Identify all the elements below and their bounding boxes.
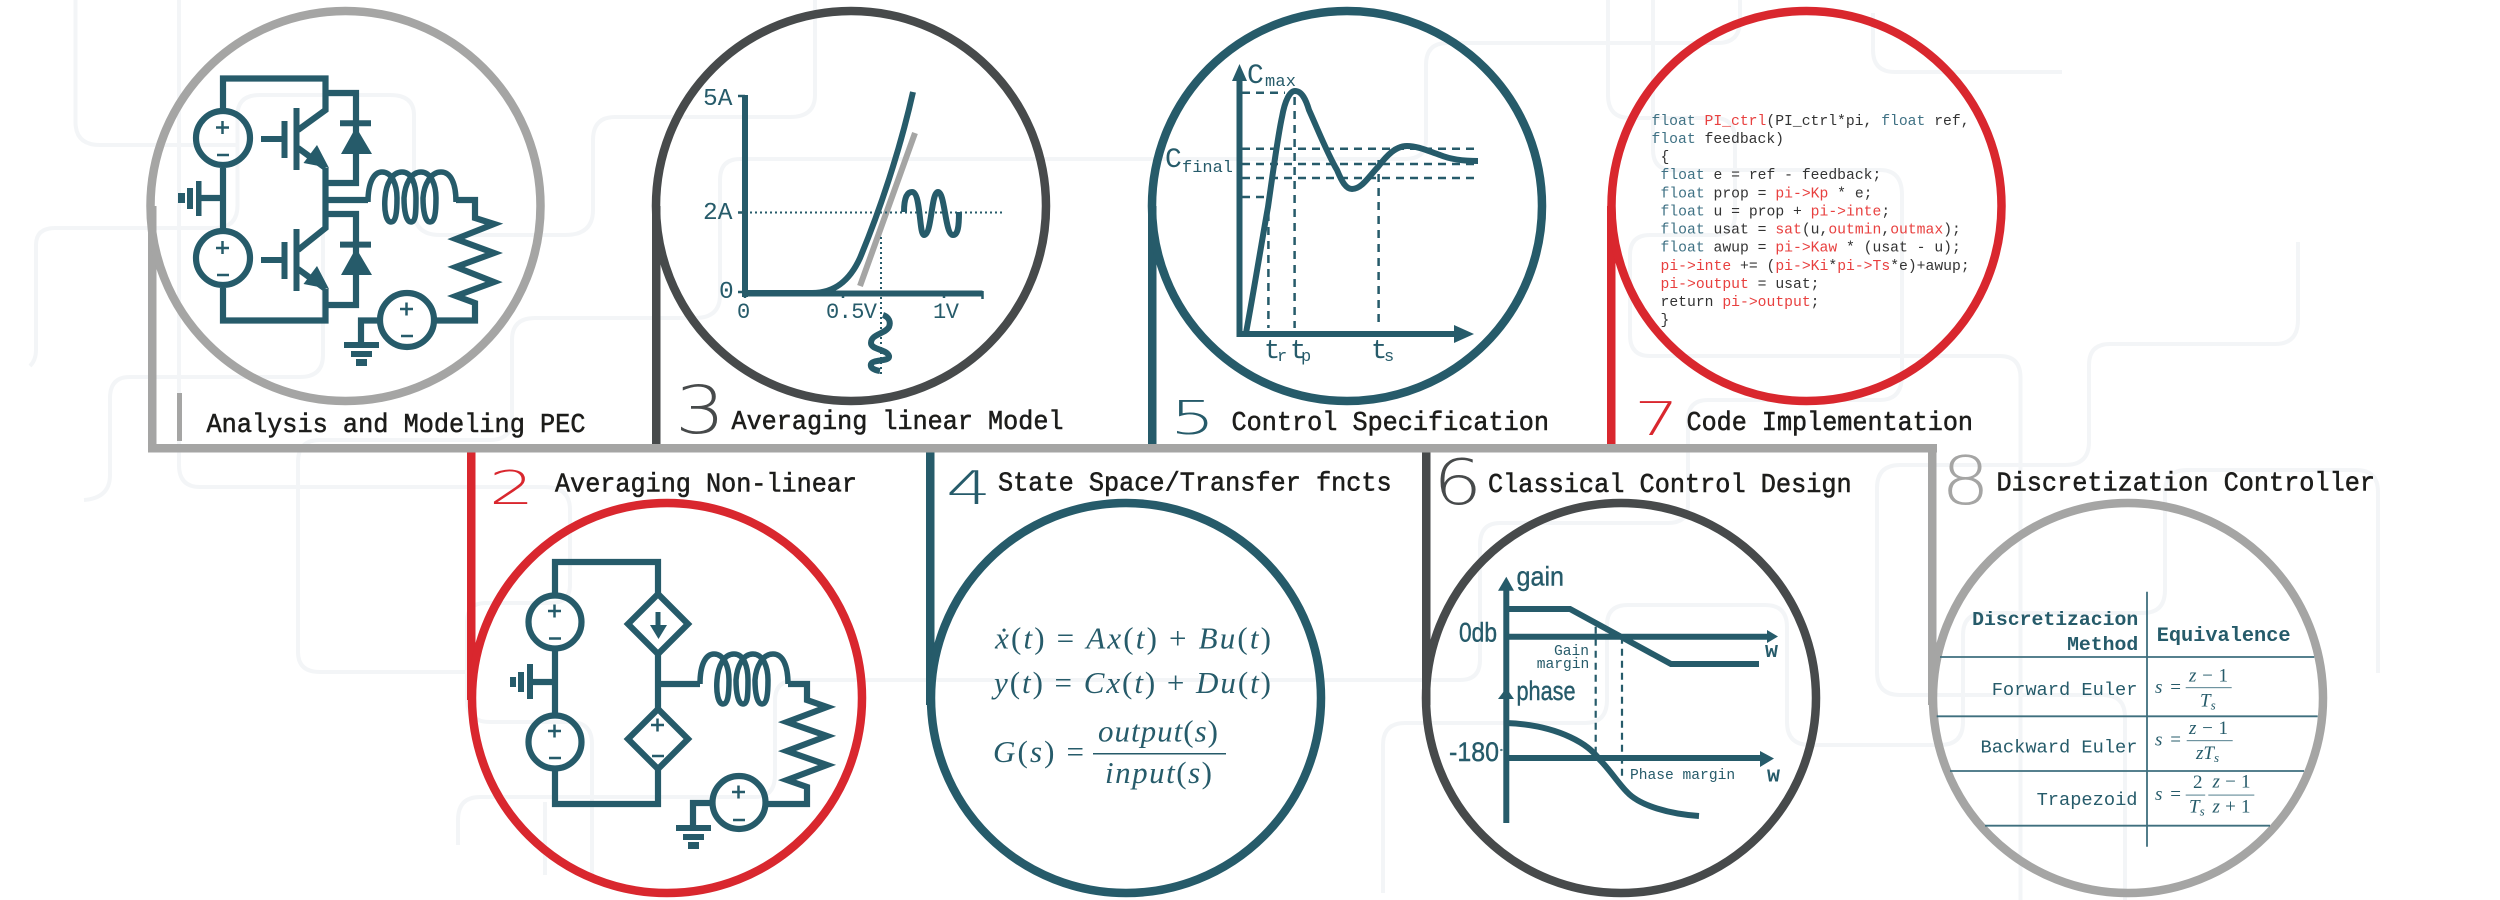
- icon: half-bridge IGBT circuit: [178, 78, 494, 366]
- heading 7: Code Implementation: [1686, 408, 1973, 438]
- table: discretization methods: s =: [2155, 677, 2181, 698]
- code block: PI controller: float u = prop + pi->inte;: [1660, 204, 1890, 220]
- chart: step response: r: [1277, 348, 1287, 367]
- chart: diode I-V curve: [703, 86, 1004, 377]
- panel 4 connector: [926, 450, 934, 705]
- chart: step response: C: [1247, 61, 1264, 92]
- chart: bode plot: Gain: [1554, 644, 1589, 660]
- table: discretization methods: [1937, 592, 2318, 847]
- panel 8: discretization controller: [1928, 443, 2375, 893]
- icon: averaged switch circuit: [510, 562, 827, 849]
- chart: step response: max: [1265, 73, 1296, 92]
- panel 3 ring: [656, 11, 1046, 401]
- code block: PI controller: float usat = sat(u,outmin,outmax);: [1660, 222, 1961, 238]
- panel 6 ring: [1426, 503, 1816, 893]
- table: discretization methods: z − 1: [2188, 718, 2228, 739]
- chart: diode I-V curve: 1V: [933, 300, 960, 325]
- code block: PI controller: float prop = pi->Kp * e;: [1660, 186, 1873, 202]
- panel 8 connector: [1928, 444, 1936, 705]
- number 1: [177, 393, 182, 441]
- panel 2 connector: [467, 450, 476, 700]
- panel 1 ring: [150, 11, 540, 401]
- equations: output(s): [1098, 714, 1218, 748]
- equations: y(t) = Cx(t) + Du(t): [991, 665, 1271, 700]
- chart: step response: p: [1301, 348, 1311, 367]
- table: discretization methods: s: [2200, 804, 2205, 819]
- code block: PI controller: pi->output = usat;: [1660, 277, 1820, 293]
- table: discretization methods: Forward Euler: [1992, 679, 2138, 701]
- chart: diode I-V curve: 5A: [703, 86, 733, 113]
- number 6: 6: [1433, 447, 1482, 519]
- chart: diode I-V curve: 0: [737, 300, 750, 325]
- code block: PI controller: float e = ref - feedback;: [1660, 168, 1881, 184]
- panel 5: control specification: [1148, 11, 1549, 446]
- table: discretization methods: Method: [2067, 634, 2138, 656]
- heading 3: Averaging linear Model: [732, 407, 1064, 437]
- table: discretization methods: s =: [2155, 784, 2181, 805]
- table: discretization methods: Discretizacion: [1972, 609, 2138, 631]
- table: discretization methods: s =: [2155, 730, 2181, 751]
- chart: bode plot: gain: [1516, 562, 1564, 592]
- table: discretization methods: zT: [2195, 743, 2215, 764]
- chart: step response: C: [1165, 145, 1182, 176]
- table: discretization methods: Trapezoid: [2037, 789, 2138, 811]
- chart: bode plot: Phase margin: [1630, 768, 1735, 784]
- equations: input(s): [1105, 755, 1212, 790]
- table: discretization methods: T: [2189, 797, 2201, 818]
- table: discretization methods: z − 1: [2188, 666, 2228, 687]
- code block: PI controller: [1652, 114, 1970, 329]
- chart: bode plot: [1449, 562, 1781, 823]
- heading 4: State Space/Transfer fncts: [998, 468, 1392, 498]
- chart: step response: [1165, 61, 1478, 367]
- panel 4 ring: [931, 503, 1321, 893]
- chart: bode plot: w: [1765, 639, 1779, 664]
- panel 8 ring: [1933, 503, 2323, 893]
- panel 2 ring: [472, 503, 862, 893]
- table: discretization methods: s: [2214, 750, 2219, 765]
- table: discretization methods: T: [2200, 691, 2212, 712]
- panel 1: analysis and modeling PEC: [148, 11, 586, 452]
- panel 2: averaging non-linear: [467, 450, 862, 893]
- chart: bode plot: -180: [1449, 737, 1499, 767]
- chart: bode plot: margin: [1537, 657, 1589, 673]
- table: discretization methods: Equivalence: [2157, 625, 2291, 648]
- panel 5 connector: [1148, 206, 1156, 446]
- code block: PI controller: pi->inte += (pi->Ki*pi->Ts*e)+awup;: [1660, 259, 1970, 275]
- chart: step response: s: [1384, 348, 1394, 367]
- chart: diode I-V curve: 0: [719, 279, 734, 306]
- equations: ẋ(t) = Ax(t) + Bu(t): [994, 620, 1271, 656]
- code block: PI controller: return pi->output;: [1660, 295, 1820, 311]
- chart: step response: final: [1182, 159, 1233, 178]
- code block: PI controller: float PI_ctrl(PI_ctrl*pi, float ref,: [1652, 114, 1970, 130]
- panel 5 ring: [1152, 11, 1542, 401]
- heading 5: Control Specification: [1232, 408, 1549, 438]
- main horizontal connector: [148, 444, 1937, 452]
- heading 1: Analysis and Modeling PEC: [206, 410, 586, 440]
- table: discretization methods: s: [2211, 698, 2216, 713]
- table: discretization methods: z + 1: [2212, 797, 2250, 818]
- number 5: 5: [1170, 392, 1215, 446]
- code block: PI controller: float awup = pi->Kaw * (usat - u);: [1660, 240, 1961, 256]
- table: discretization methods: z − 1: [2212, 772, 2250, 793]
- table: discretization methods: 2: [2193, 772, 2202, 793]
- chart: bode plot: w: [1767, 764, 1781, 789]
- chart: bode plot: °: [1500, 748, 1503, 756]
- code block: PI controller: }: [1660, 313, 1669, 329]
- panel 7 ring: [1612, 11, 2002, 401]
- chart: bode plot: 0db: [1459, 618, 1497, 648]
- chart: step response: t: [1371, 337, 1387, 367]
- number 8: 8: [1941, 443, 1990, 521]
- heading 6: Classical Control Design: [1488, 470, 1852, 500]
- panel 6: classical control design: [1422, 447, 1852, 893]
- chart: step response: t: [1290, 337, 1306, 367]
- equations: [991, 620, 1271, 790]
- number 2: 2: [489, 462, 534, 516]
- chart: diode I-V curve: 2A: [703, 200, 733, 227]
- table: discretization methods: Backward Euler: [1980, 737, 2138, 759]
- panel 3 connector: [652, 206, 660, 446]
- panel 7: code implementation: [1607, 11, 2002, 447]
- number 7: 7: [1634, 393, 1679, 447]
- panel 1 connector: [148, 206, 156, 452]
- equations: G(s) =: [993, 734, 1084, 769]
- heading 2: Averaging Non-linear: [555, 470, 857, 500]
- chart: step response: t: [1264, 337, 1280, 367]
- panel 6 connector: [1422, 450, 1430, 705]
- code block: PI controller: float feedback): [1652, 132, 1784, 148]
- chart: diode I-V curve: 0.5V: [826, 300, 878, 325]
- heading 8: Discretization Controller: [1996, 468, 2375, 498]
- chart: bode plot: phase: [1516, 676, 1576, 706]
- number 4: 4: [946, 462, 991, 516]
- number 3: 3: [675, 372, 725, 449]
- panel 3: averaging linear model: [652, 11, 1064, 449]
- code block: PI controller: {: [1660, 150, 1669, 166]
- panel 4: state space and transfer functions: [926, 450, 1392, 893]
- panel 7 connector: [1607, 206, 1616, 446]
